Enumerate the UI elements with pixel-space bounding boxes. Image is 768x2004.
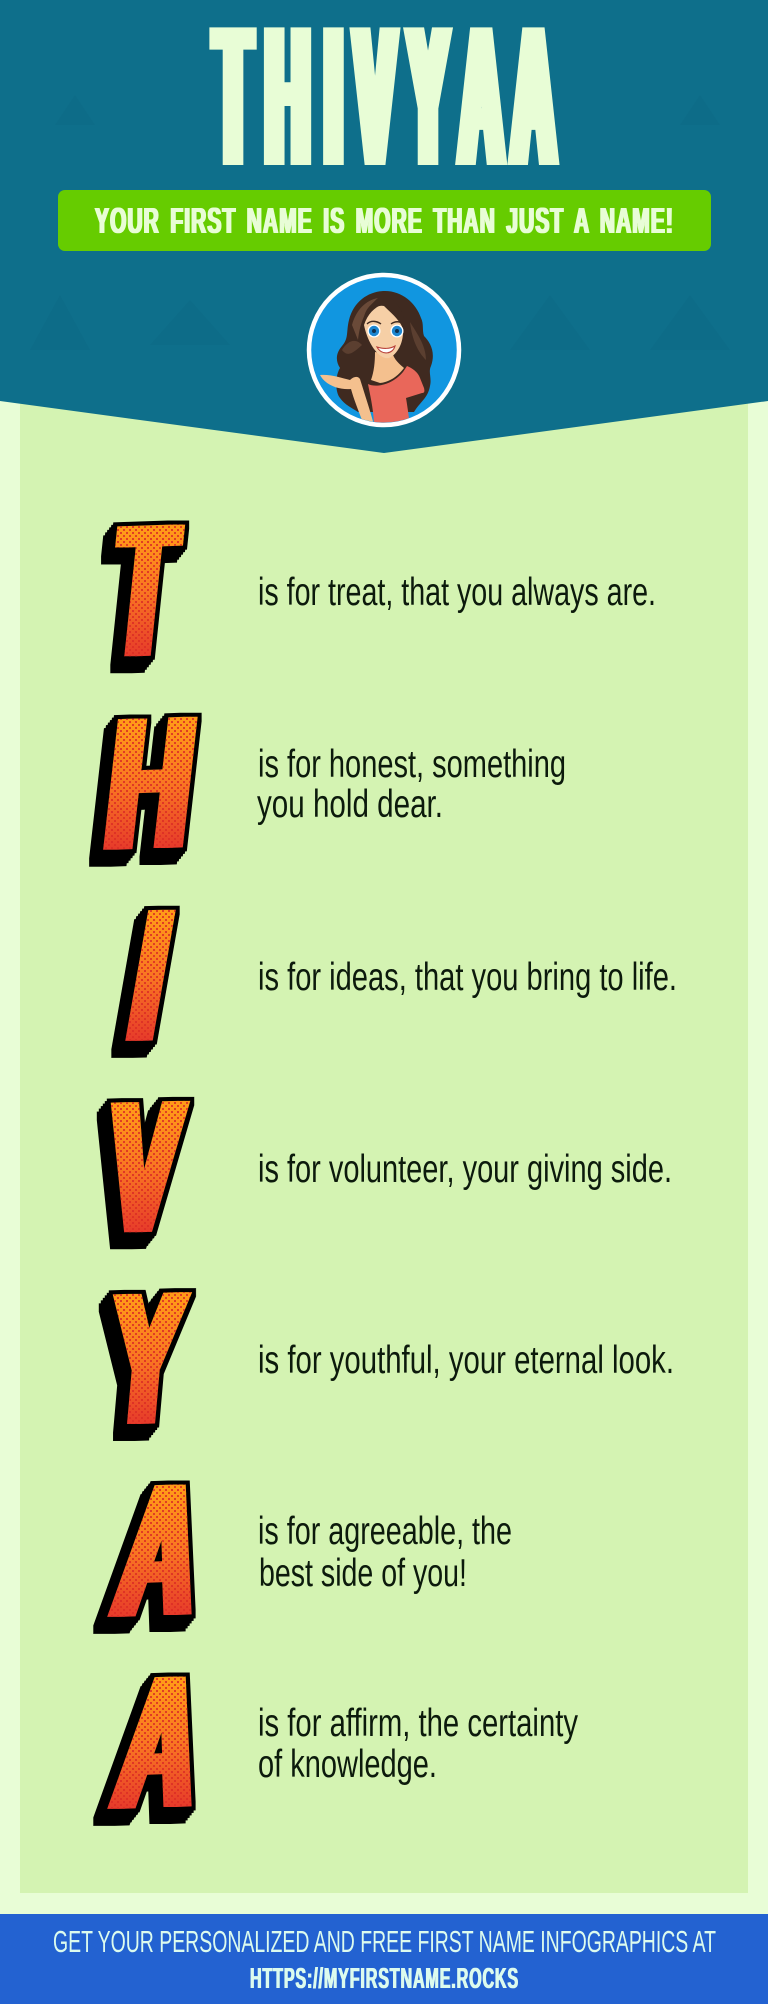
text: second A lines: of knowledge.: [258, 1743, 437, 1786]
eyes: [367, 321, 404, 338]
letter H: H: [97, 676, 203, 891]
text: H lines: you hold dear.: [257, 783, 443, 826]
text: first A lines: [258, 1510, 512, 1595]
letter I: I: [118, 869, 183, 1082]
letter V: V: [100, 1060, 188, 1274]
panel: header banner: [0, 0, 768, 453]
arm and hand: [320, 374, 374, 422]
text: first A lines: best side of you!: [259, 1552, 467, 1595]
text: second A lines: [258, 1702, 579, 1786]
dress: [368, 366, 424, 428]
hair parting: [364, 304, 379, 325]
smile: [377, 346, 395, 353]
footer url: HTTPS://MYFIRSTNAME.ROCKS: [250, 1963, 519, 1995]
panel: footer: [0, 1914, 768, 2004]
letter Y: Y: [102, 1252, 191, 1466]
subtitle banner: [58, 190, 711, 251]
letter A: A: [105, 1635, 215, 1850]
text: H lines: is for honest, something: [258, 743, 566, 786]
text: H lines: [257, 743, 566, 826]
icon: woman avatar: [309, 275, 459, 428]
letter T: T: [105, 484, 184, 698]
hair: [336, 291, 433, 412]
neck and chest: [371, 352, 404, 383]
letter A: A: [105, 1443, 215, 1658]
face: [364, 306, 403, 358]
text: first A lines: is for agreeable, the: [258, 1510, 512, 1553]
header texture: [30, 95, 730, 350]
panel: letters background: [20, 380, 748, 1893]
text: second A lines: is for affirm, the certainty: [258, 1702, 579, 1745]
